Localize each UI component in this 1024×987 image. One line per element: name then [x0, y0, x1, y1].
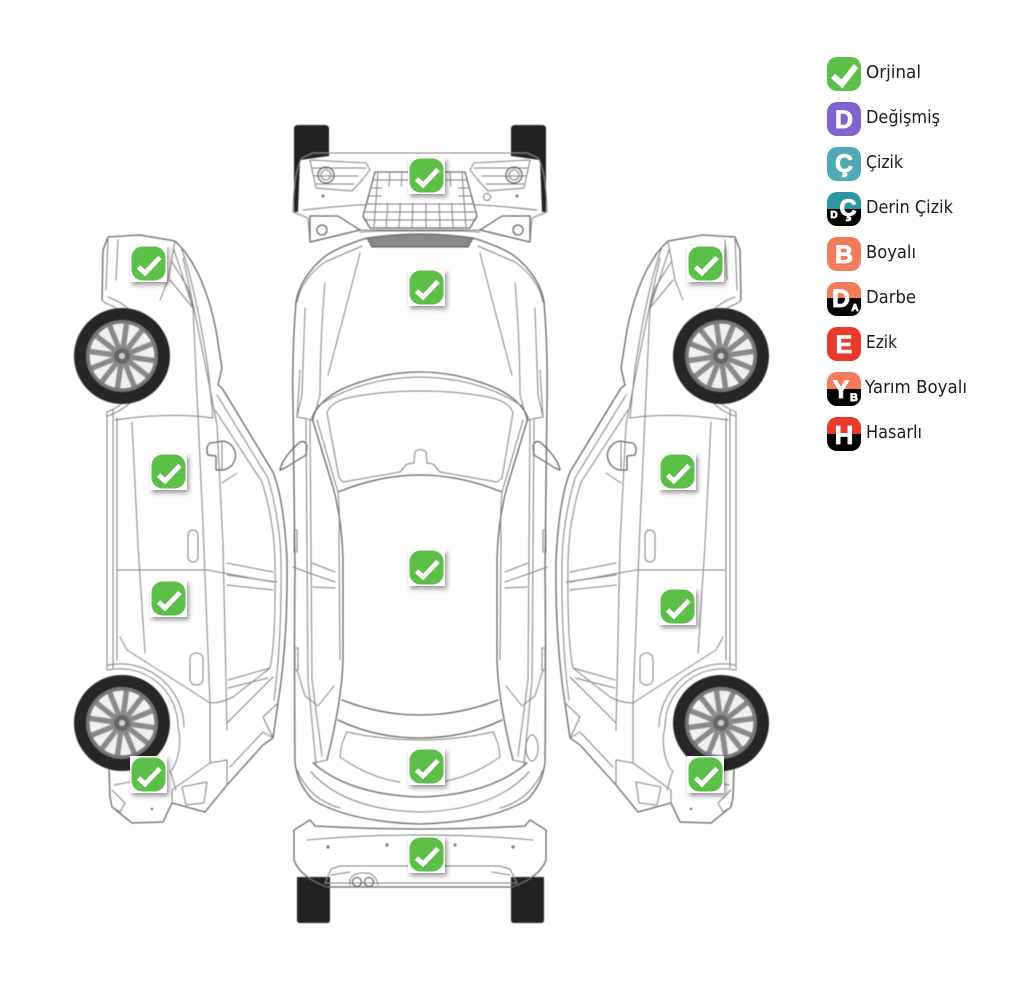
- legend: Yarım Boyalı: B: [850, 392, 858, 404]
- check: right rear fender: [687, 756, 724, 793]
- legend: Derin Çizik: D: [830, 210, 838, 221]
- legend: Darbe: D: [832, 285, 850, 313]
- body lines: [102, 235, 287, 823]
- body outline: [280, 234, 560, 824]
- check: left rear fender: [130, 756, 167, 793]
- windshield and roof: [312, 372, 528, 418]
- check: front bumper: [408, 157, 445, 194]
- legend: Ezik: E: [836, 331, 852, 359]
- legend: Ezik: [827, 327, 898, 361]
- legend: [827, 57, 967, 451]
- legend: Boyalı: B: [835, 241, 853, 269]
- legend: Boyalı: Boyalı: [866, 243, 916, 263]
- door handles: [188, 530, 198, 562]
- legend: Değişmiş: Değişmiş: [866, 108, 940, 128]
- legend: Çizik: [827, 147, 904, 181]
- legend: Derin Çizik: Ç: [839, 195, 857, 222]
- check: left front fender: [130, 245, 167, 282]
- legend: Çizik: Çizik: [866, 153, 904, 173]
- legend: Yarım Boyalı: [827, 372, 967, 406]
- side windows: [293, 563, 335, 588]
- fog lamps: [310, 216, 360, 242]
- legend: Değişmiş: D: [835, 106, 853, 134]
- left side car: [74, 235, 287, 823]
- legend: Hasarlı: [827, 417, 922, 451]
- legend: Boyalı: [827, 237, 916, 271]
- rear window and trunk: [342, 700, 498, 715]
- legend: Çizik: Ç: [835, 150, 853, 178]
- legend: Derin Çizik: Derin Çizik: [866, 198, 954, 218]
- legend: Yarım Boyalı: Yarım Boyalı: [864, 378, 967, 398]
- check: roof: [408, 549, 445, 586]
- rear wheel: [74, 675, 170, 771]
- check: left front door: [150, 453, 187, 490]
- legend: Değişmiş: [827, 102, 940, 136]
- check: left rear door: [150, 580, 187, 617]
- legend: Orjinal: Orjinal: [866, 63, 921, 83]
- side mirror: [207, 441, 236, 470]
- legend: Ezik: Ezik: [866, 333, 898, 353]
- legend: Darbe: [827, 282, 916, 316]
- top view car: [280, 125, 560, 923]
- legend: Darbe: Darbe: [866, 288, 916, 308]
- legend: Orjinal: [827, 57, 921, 91]
- check: rear bumper: [408, 836, 445, 873]
- check: right front fender: [687, 245, 724, 282]
- legend: Hasarlı: Hasarlı: [866, 423, 922, 443]
- front wheel: [74, 308, 170, 404]
- legend: Yarım Boyalı: Y: [833, 376, 850, 404]
- mirrors: [280, 442, 307, 470]
- front tyres: [294, 125, 546, 212]
- legend: Hasarlı: H: [835, 420, 853, 450]
- rear bumper: [294, 820, 546, 923]
- check: trunk: [408, 748, 445, 785]
- front bumper: [293, 153, 547, 242]
- check: hood: [408, 269, 445, 306]
- legend: Darbe: A: [851, 303, 859, 314]
- check: right rear door: [659, 588, 696, 625]
- legend: Derin Çizik: [827, 192, 954, 226]
- check: right front door: [659, 453, 696, 490]
- grille: [363, 172, 477, 228]
- right side car: [556, 235, 769, 823]
